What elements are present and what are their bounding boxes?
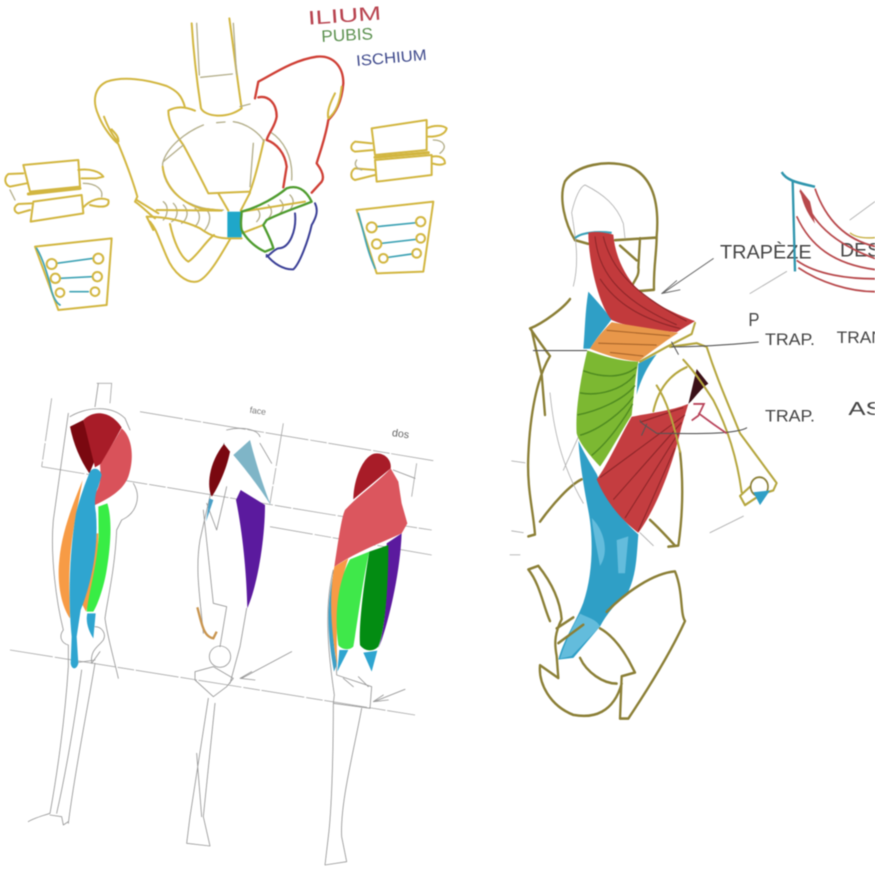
muscle: lower back, latissimus aponeurosis (558, 441, 638, 660)
sacral foramina, right (357, 202, 433, 273)
arm bones (640, 323, 777, 505)
pelvis bones (528, 566, 685, 719)
green pubis outline (241, 187, 312, 252)
inset: trapezius fibers (782, 172, 875, 292)
panel: pelvis diagram (5, 4, 447, 310)
knee cap (209, 646, 231, 667)
leg three outline (325, 470, 415, 865)
shoulder and ribcage lines (510, 299, 682, 555)
label: pubis: PUBIS (321, 24, 373, 46)
label: trapeze: TRAPÈZE (720, 241, 812, 263)
pubic arch and hatching (137, 195, 305, 282)
sacral inlet (168, 107, 264, 193)
label: trap ascendant: TRAP. (765, 407, 815, 426)
muscle: latissimus dorsi (597, 404, 688, 533)
left ilium (95, 79, 185, 218)
pelvic ring, grey (163, 104, 292, 210)
label: ilium: ILIUM (307, 4, 382, 30)
lumbar vertebrae, right (351, 120, 447, 182)
label: p mark: P (748, 309, 759, 330)
panel: leg muscles (10, 383, 433, 865)
panel: back muscles (510, 163, 875, 719)
leg two outline (187, 428, 272, 846)
leg three caption: dos (391, 427, 410, 441)
label: trap transverse: TRAP. (765, 330, 815, 349)
arrow: leg three (373, 689, 405, 702)
muscle: trapezius middle (590, 322, 678, 362)
leg two caption: face (249, 405, 267, 417)
sketch guide lines (10, 383, 433, 715)
label: ischium: ISCHIUM (356, 47, 427, 70)
leader line: trap transverse (533, 342, 758, 354)
skull and neck (562, 163, 657, 292)
lumbar vertebrae, left (5, 160, 109, 222)
sacrum spine (192, 18, 242, 116)
pubic symphysis (227, 212, 242, 237)
arrow: leg two (240, 652, 292, 680)
leg one muscles (59, 413, 132, 668)
leg one outline (28, 383, 137, 825)
muscle: tendon insertion (688, 369, 708, 404)
leader line: trap ascendant (640, 420, 747, 435)
blue ischium outline (267, 203, 317, 269)
arrow: trapeze (662, 259, 713, 294)
sacral foramina, left (35, 238, 112, 310)
leg two muscles (197, 440, 271, 638)
red ilium (255, 57, 343, 193)
muscle: trapezius lower (576, 351, 638, 466)
sketch faint lines (710, 202, 875, 533)
muscle: trapezius upper (588, 232, 695, 332)
red scapula mark (692, 404, 727, 433)
leg three muscles (328, 453, 407, 672)
muscle: infraspinatus blue (583, 292, 657, 395)
